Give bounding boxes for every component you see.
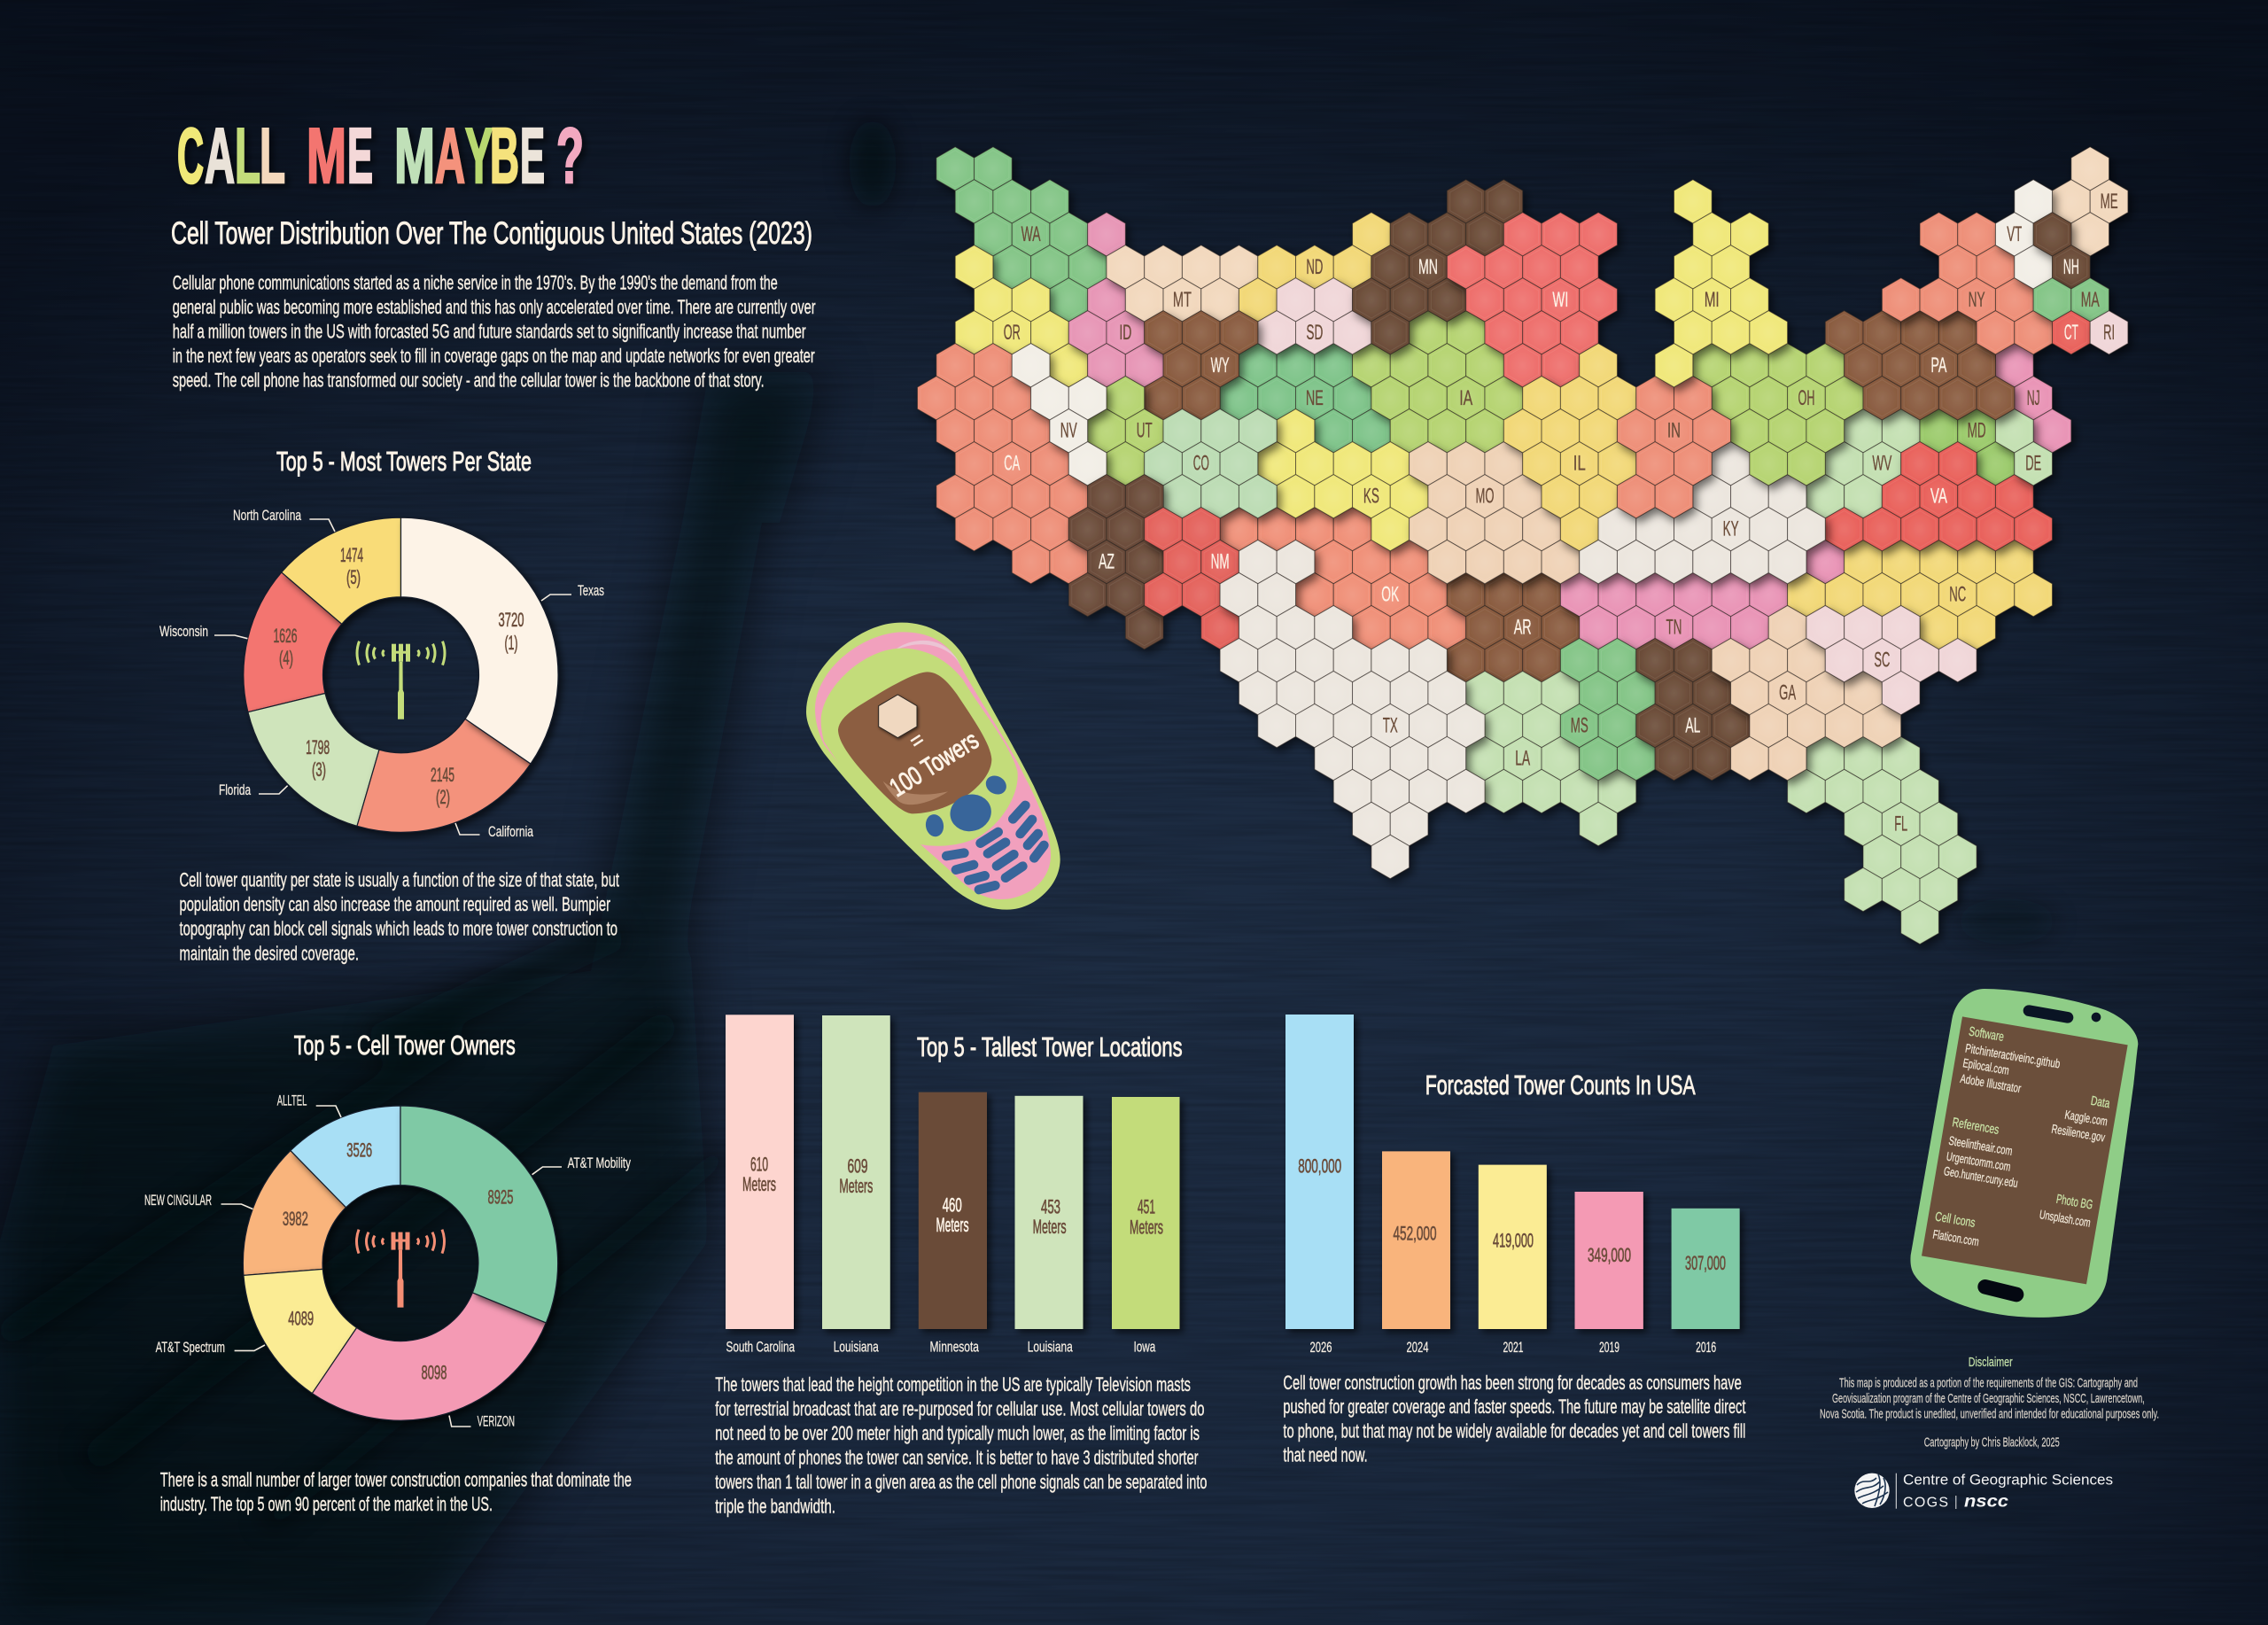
state: CT	[2052, 311, 2090, 354]
state: UT: UT	[1137, 419, 1153, 443]
sources text: Resilience.gov	[2050, 1122, 2106, 1145]
year labels: 2026	[1309, 1339, 1332, 1356]
paragraph: tallest towers: towers than 1 tall tower in a given area as the cell phone signals can be separated into	[715, 1471, 1207, 1493]
state: CO	[1145, 409, 1277, 518]
state: IN: IN	[1667, 419, 1681, 443]
state: VT	[1995, 180, 2052, 289]
legend label: 100 Towers	[884, 726, 984, 803]
bar values: 419,000	[1493, 1229, 1534, 1251]
labels: North Carolina	[233, 507, 301, 524]
state: OR: OR	[1004, 321, 1021, 345]
title: M	[307, 112, 346, 199]
state: AZ	[1068, 475, 1163, 649]
state: OR	[955, 245, 1088, 387]
bar values: Meters	[1130, 1217, 1163, 1239]
state: MD: MD	[1968, 419, 1986, 443]
paragraph: tower owners: industry. The top 5 own 90 percent of the market in the US.	[160, 1493, 493, 1515]
paragraph: tallest towers: triple the bandwidth.	[715, 1496, 835, 1517]
state: WY: WY	[1211, 354, 1230, 377]
state: KS: KS	[1363, 485, 1379, 509]
sources text: Kaggle.com	[2063, 1108, 2109, 1128]
intro text: general public was becoming more established and this has only accelerated over time. There are currently over	[173, 296, 816, 318]
bar labels: Louisiana	[1028, 1339, 1073, 1356]
state: NJ: NJ	[2027, 386, 2040, 410]
sources text: Adobe Illustrator	[1959, 1071, 2023, 1095]
state: MA	[2033, 278, 2109, 322]
title: M	[394, 112, 435, 199]
state: OK	[1220, 508, 1466, 649]
paragraph: towers per state: Cell tower quantity per state is usually a function of the size of that state, but	[179, 868, 619, 891]
state: MT: MT	[1173, 288, 1192, 312]
state: AZ: AZ	[1099, 550, 1115, 574]
values: 3720	[498, 609, 524, 631]
state: AR	[1447, 572, 1580, 682]
state: GA	[1712, 605, 1901, 781]
paragraph: tallest towers: for terrestrial broadcast that are re-purposed for cellular use. Most cellular towers do	[715, 1398, 1205, 1419]
paragraph: forecasted counts: to phone, but that may not be widely available for decades yet and cell towers fill	[1283, 1419, 1745, 1442]
values: (2)	[436, 786, 450, 808]
values: 1798	[306, 736, 330, 758]
state: WA	[936, 147, 1107, 322]
title: E	[520, 112, 545, 199]
values: 1474	[340, 544, 363, 566]
state: RI	[2090, 311, 2128, 354]
state: DE	[1995, 409, 2052, 486]
state: AR: AR	[1514, 616, 1532, 640]
bar values: 451	[1138, 1196, 1155, 1218]
sources text: Photo BG	[2055, 1193, 2093, 1213]
title: C	[177, 112, 204, 199]
bar chart: tallest towers	[726, 1015, 1180, 1356]
state: NV: NV	[1060, 419, 1077, 443]
bar values	[742, 1154, 1163, 1239]
state: NV	[1012, 344, 1107, 486]
state: MI: MI	[1705, 288, 1720, 312]
state: MO	[1410, 442, 1580, 584]
state: LA: LA	[1515, 746, 1530, 771]
bar values: Meters	[1033, 1216, 1067, 1238]
title: L	[260, 112, 285, 199]
state: ME: ME	[2101, 190, 2118, 214]
bar labels: Iowa	[1134, 1339, 1156, 1356]
state: IA	[1353, 311, 1523, 453]
title: B	[490, 112, 519, 199]
sources text: References	[1951, 1116, 2000, 1138]
sources text: Cell Icons	[1934, 1210, 1977, 1231]
paragraph: forecasted counts: that need now.	[1283, 1444, 1368, 1466]
paragraph: towers per state: topography can block cell signals which leads to more tower construction to	[179, 918, 617, 939]
bar values: 349,000	[1588, 1244, 1631, 1266]
paragraph: tallest towers: The towers that lead the height competition in the US are typically Television masts	[715, 1373, 1191, 1396]
state: AL: AL	[1685, 714, 1700, 738]
labels: California	[488, 823, 533, 840]
year labels: 2021	[1503, 1339, 1524, 1356]
bar values: 610	[750, 1154, 768, 1175]
state: NJ	[1995, 344, 2071, 453]
values: 1626	[273, 625, 298, 647]
state: OK: OK	[1381, 583, 1399, 607]
state: KS	[1258, 409, 1428, 551]
bar values	[1298, 1155, 1726, 1274]
title: Y	[465, 112, 493, 199]
state: KY	[1580, 442, 1825, 584]
bar values: 452,000	[1393, 1222, 1437, 1244]
state: MD	[1920, 409, 2015, 486]
donut chart: most towers per state	[159, 507, 604, 840]
state: MT	[1107, 245, 1258, 322]
paragraph: tallest towers: the amount of phones the tower can service. It is better to have 3 distributed shorter	[715, 1446, 1199, 1469]
state: WI: WI	[1552, 288, 1568, 312]
sources text: Data	[2090, 1094, 2111, 1111]
sources text: Pitchinteractiveinc.github	[1964, 1041, 2062, 1071]
disclaimer	[1820, 1356, 2159, 1450]
intro text	[173, 271, 816, 392]
intro text: half a million towers in the US with forcasted 5G and future standards set to significantly increase that number	[173, 321, 806, 342]
state: SD: SD	[1306, 321, 1323, 345]
state: TN: TN	[1666, 616, 1682, 640]
labels: AT&T Mobility	[568, 1155, 631, 1171]
state: WY	[1145, 311, 1258, 420]
sources text	[1931, 1025, 2111, 1248]
paragraph: towers per state	[179, 868, 619, 964]
state: NC: NC	[1949, 583, 1966, 607]
disclaimer: Cartography by Chris Blacklock, 2025	[1924, 1435, 2060, 1450]
bar values: Meters	[839, 1175, 873, 1197]
icon: salmon tower	[356, 1230, 445, 1308]
state: TX: TX	[1383, 714, 1398, 738]
state: NH: NH	[2063, 255, 2079, 279]
state: FL: FL	[1894, 812, 1907, 836]
title: A	[435, 112, 465, 199]
values: 3526	[346, 1139, 372, 1162]
title: L	[235, 112, 260, 199]
state: NY: NY	[1969, 288, 1985, 312]
title: A	[205, 112, 235, 199]
labels: VERIZON	[478, 1413, 515, 1430]
state: MS: MS	[1571, 714, 1588, 738]
sources text: Software	[1968, 1025, 2005, 1045]
state: DE: DE	[2025, 452, 2041, 476]
state: NE	[1220, 344, 1390, 453]
state: WV	[1806, 409, 1920, 518]
state: SC	[1806, 605, 1977, 715]
sources text: Geo.hunter.cuny.edu	[1943, 1163, 2019, 1190]
state: VA	[1825, 442, 2052, 551]
values: 4089	[288, 1308, 314, 1329]
labels: Florida	[219, 781, 251, 798]
state: IA: IA	[1459, 386, 1472, 410]
state: FL	[1788, 736, 1977, 945]
state: KY: KY	[1723, 517, 1739, 541]
intro text: Cellular phone communications started as a niche service in the 1970's. By the 1990's the demand from the	[173, 271, 778, 294]
state: IL	[1503, 344, 1636, 551]
icon: smartphone with sources	[1910, 989, 2138, 1318]
labels	[144, 1092, 631, 1430]
bar labels: Minnesota	[930, 1339, 979, 1356]
state: CT: CT	[2064, 321, 2078, 345]
bar values: 609	[847, 1155, 868, 1177]
state: CA	[918, 344, 1088, 584]
year labels: 2019	[1599, 1339, 1619, 1356]
state: ND: ND	[1306, 255, 1323, 279]
state: MO: MO	[1476, 485, 1494, 509]
state: MI	[1655, 180, 1788, 387]
paragraph: forecasted counts: pushed for greater coverage and faster speeds. The future may be satellite direct	[1283, 1396, 1745, 1418]
state: SC: SC	[1874, 649, 1890, 673]
state: SD	[1258, 278, 1371, 354]
paragraph: forecasted counts	[1283, 1372, 1745, 1466]
values: (1)	[505, 632, 517, 654]
labels: ALLTEL	[277, 1092, 307, 1109]
state: MS	[1560, 638, 1655, 781]
bar values: Meters	[742, 1173, 776, 1195]
equals sign: =	[905, 727, 928, 754]
title: E	[347, 112, 373, 199]
logo: Centre of Geographic Sciences: COGS	[1903, 1496, 1948, 1511]
state: IL: IL	[1573, 452, 1586, 476]
state: MN: MN	[1418, 255, 1438, 279]
state: GA: GA	[1779, 681, 1796, 705]
year labels: 2024	[1407, 1339, 1428, 1356]
logo: Centre of Geographic Sciences	[1854, 1473, 2113, 1512]
paragraph: towers per state: maintain the desired coverage.	[179, 943, 359, 964]
state: TX	[1220, 540, 1485, 879]
values: 2145	[431, 764, 454, 786]
state: VA: VA	[1930, 485, 1947, 509]
bar values: 453	[1041, 1195, 1060, 1217]
heading: forecasted counts: Forcasted Tower Counts In USA	[1425, 1069, 1696, 1100]
state: ND	[1239, 213, 1390, 322]
bar values: Meters	[936, 1214, 969, 1236]
heading: cell tower owners: Top 5 - Cell Tower Owners	[294, 1030, 516, 1061]
legend hex	[879, 695, 917, 738]
state: PA	[1825, 311, 2015, 420]
state: AL	[1636, 638, 1750, 781]
intro text: in the next few years as operators seek to fill in coverage gaps on the map and update networks for even greater	[173, 345, 815, 367]
sources text: Unsplash.com	[2039, 1207, 2092, 1230]
bar labels	[726, 1339, 1156, 1356]
sources text: Epilocal.com	[1961, 1055, 2010, 1077]
state: TN	[1560, 540, 1845, 649]
year labels: 2016	[1696, 1339, 1716, 1356]
state: WV: WV	[1872, 452, 1891, 476]
state: NY	[1882, 213, 2052, 354]
values	[283, 1139, 514, 1384]
state: NH	[2033, 213, 2090, 289]
paragraph: tallest towers: not need to be over 200 meter high and typically much lower, as the limiting factor is	[715, 1422, 1200, 1444]
icon: green tower	[357, 641, 445, 719]
paragraph: forecasted counts: Cell tower construction growth has been strong for decades as consumers have	[1283, 1372, 1742, 1394]
state: MN	[1353, 180, 1523, 354]
subtitle: Cell Tower Distribution Over The Contiguous United States (2023)	[171, 216, 812, 251]
values	[273, 544, 524, 808]
state: OH	[1693, 344, 1863, 486]
disclaimer: Disclaimer	[1969, 1356, 2013, 1370]
state: PA: PA	[1930, 354, 1946, 377]
state: WA: WA	[1021, 222, 1041, 246]
state: NC	[1788, 540, 2052, 649]
state: MA: MA	[2081, 288, 2100, 312]
state: ID	[1068, 213, 1163, 387]
icon: flip phone legend	[806, 623, 1060, 910]
labels: Texas	[578, 582, 604, 599]
state: CO: CO	[1193, 452, 1209, 476]
state: VT: VT	[2007, 222, 2022, 246]
state: WI	[1447, 213, 1617, 387]
hex map of the United States	[918, 147, 2128, 945]
donut chart: cell tower owners	[144, 1092, 631, 1430]
state: LA	[1466, 671, 1636, 846]
bar values: 800,000	[1298, 1155, 1341, 1178]
paragraph: towers per state: population density can also increase the amount required as well. Bumpier	[179, 893, 610, 915]
state: NM	[1145, 508, 1239, 649]
paragraph: tallest towers	[715, 1373, 1207, 1517]
values: 8098	[422, 1362, 447, 1384]
bar values: 460	[943, 1193, 962, 1216]
title	[177, 112, 584, 199]
paragraph: tower owners	[160, 1468, 632, 1515]
bar labels: Louisiana	[834, 1339, 879, 1356]
title: ?	[556, 112, 584, 199]
sources text: Steelintheair.com	[1947, 1133, 2014, 1158]
values: 8925	[487, 1186, 514, 1209]
bar values: 307,000	[1685, 1252, 1726, 1274]
state: IN	[1617, 377, 1731, 518]
state: NE: NE	[1306, 386, 1324, 410]
state: NM: NM	[1211, 550, 1230, 574]
intro text: speed. The cell phone has transformed our society - and the cellular tower is the backbone of that story.	[173, 369, 765, 392]
state: CA: CA	[1004, 452, 1020, 476]
sources text: Urgentcomm.com	[1946, 1149, 2012, 1174]
values: (3)	[312, 758, 326, 781]
heading: tallest towers: Top 5 - Tallest Tower Locations	[917, 1031, 1183, 1062]
labels: AT&T Spectrum	[156, 1339, 225, 1356]
bar labels: South Carolina	[726, 1339, 795, 1356]
logo: Centre of Geographic Sciences: Centre of Geographic Sciences	[1903, 1473, 2113, 1489]
labels: Wisconsin	[159, 623, 208, 640]
labels	[159, 507, 604, 840]
state: ID: ID	[1119, 321, 1131, 345]
labels: NEW CINGULAR	[144, 1192, 212, 1209]
values: (5)	[346, 566, 361, 588]
state: RI: RI	[2103, 321, 2115, 345]
year labels	[1309, 1339, 1716, 1356]
state: OH: OH	[1798, 386, 1814, 410]
phone buttons	[924, 772, 1010, 838]
paragraph: tower owners: There is a small number of larger tower construction companies that dominate the	[160, 1468, 632, 1490]
heading: most towers per state: Top 5 - Most Towers Per State	[276, 446, 532, 477]
state: UT	[1088, 377, 1163, 486]
logo: Centre of Geographic Sciences: nscc	[1964, 1493, 2008, 1512]
bar chart: forecasted tower counts	[1285, 1015, 1740, 1356]
sources text: Flaticon.com	[1931, 1227, 1980, 1248]
state: ME	[2052, 147, 2128, 256]
values: (4)	[279, 647, 293, 669]
values: 3982	[283, 1208, 308, 1230]
